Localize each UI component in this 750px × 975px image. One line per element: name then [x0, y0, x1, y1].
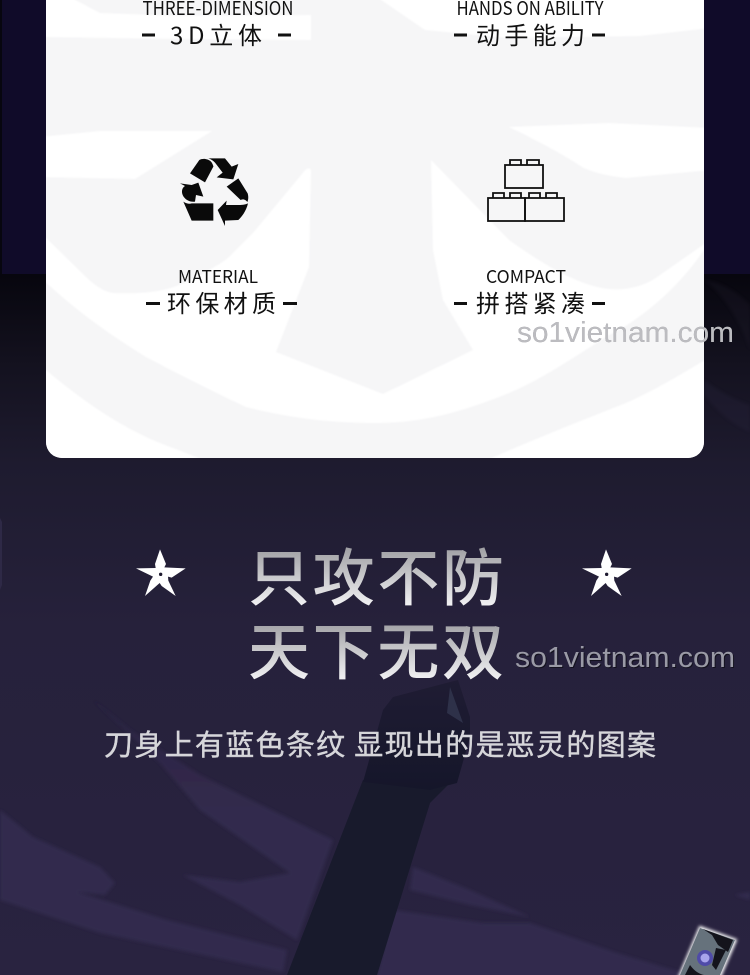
- feature: three-dimension label: [142, 0, 294, 51]
- icon: building bricks: [488, 160, 564, 221]
- feature: hands on ability label: [454, 0, 605, 51]
- feature: hands on ability label: 动手能力: [476, 16, 585, 51]
- feature: compact label: [454, 263, 605, 319]
- feature: compact label: COMPACT: [486, 263, 566, 289]
- feature: material label: [146, 263, 297, 319]
- feature: three-dimension label: 3D立体: [170, 16, 262, 51]
- heading line one: 只攻不防: [248, 528, 504, 618]
- white card: [40, 0, 710, 465]
- feature: material label: MATERIAL: [178, 263, 258, 289]
- subtitle: 刀身上有蓝色条纹 显现出的是恶灵的图案: [104, 722, 656, 764]
- heading line two: 天下无双: [248, 602, 504, 692]
- dark sword blade: [287, 680, 470, 975]
- icon: right shuriken star: [582, 549, 632, 596]
- icon: sword hilt fragment: [679, 927, 736, 975]
- icon: recycle: [180, 158, 248, 226]
- watermark bottom: so1vietnam.com: [515, 642, 735, 674]
- icon: left shuriken star: [136, 549, 186, 596]
- feature: compact label: 拼搭紧凑: [476, 284, 585, 319]
- watermark top: so1vietnam.com: [517, 317, 734, 349]
- card watermark emblem: [40, 0, 710, 465]
- feature: material label: 环保材质: [167, 284, 276, 319]
- background brush strokes: [0, 700, 750, 975]
